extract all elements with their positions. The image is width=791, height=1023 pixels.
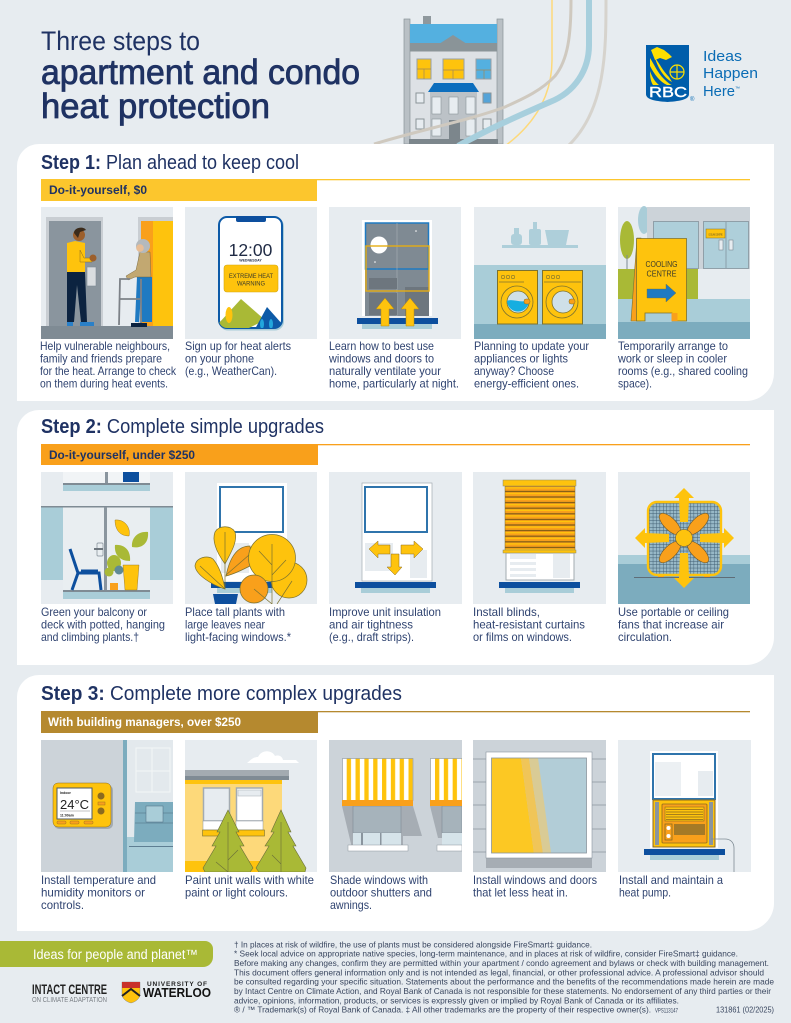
person: woman with walker — [119, 239, 152, 327]
step 2 heading: Step 2: Complete simple upgrades — [41, 416, 324, 438]
phone landscape — [219, 299, 283, 329]
Intact Centre logo: ON CLIMATE ADAPTATION — [32, 997, 107, 1004]
sill — [355, 582, 436, 588]
step 1 heading: Step 1: Plan ahead to keep cool — [41, 152, 299, 174]
step 3 cost bar — [41, 711, 750, 733]
step 3 captions — [41, 873, 723, 912]
arrows up — [376, 298, 394, 326]
washer — [498, 270, 538, 324]
footnotes: * Seek local advice on appropriate native species, long-term maintenance, and in places at risk of wildfire, consider FireSmart‡ guidance. — [234, 949, 738, 959]
windows — [204, 788, 230, 821]
tile: awnings — [329, 740, 462, 872]
step 2 cost bar — [41, 444, 750, 465]
cloud — [247, 751, 299, 763]
caption 3 — [328, 339, 459, 390]
heat pump unit — [653, 800, 715, 847]
step 1 cost bar: Do-it-yourself, $0 — [49, 185, 147, 197]
footnotes: advice, opinions, information, products, or services is expressly given or implied by Royal Bank of Canada or its affiliates. — [234, 995, 679, 1005]
caption 1 — [41, 605, 165, 644]
sill — [362, 324, 432, 329]
caption 1: on them during heat events. — [40, 376, 168, 390]
caption 4: Planning to update your — [474, 339, 589, 353]
caption 4: appliances or lights — [474, 352, 568, 366]
caption 2: large leaves near — [185, 618, 265, 632]
caption 5: Install and maintain a — [619, 873, 723, 887]
caption 2: Place tall plants with — [185, 605, 285, 619]
shelf — [502, 222, 578, 248]
caption 5: space). — [618, 376, 652, 390]
thermostat device: Indoor — [60, 791, 72, 795]
footnotes: by Intact Centre on Climate Action, and Royal Bank of Canada is not responsible for these statements. No endorsement of any third parties or their — [234, 986, 771, 996]
caption 2: light-facing windows.* — [185, 630, 291, 644]
shield — [122, 982, 140, 1003]
lion — [650, 47, 684, 85]
caption 1: deck with potted, hanging — [41, 618, 165, 632]
tagline: Ideas — [703, 48, 742, 65]
caption 3: (e.g., draft strips). — [329, 630, 414, 644]
panel: step 2 — [17, 410, 774, 665]
registered mark: ® — [690, 96, 695, 103]
caption 2 — [185, 873, 314, 900]
caption 5 — [617, 339, 748, 390]
fan blades — [656, 510, 712, 566]
left window — [348, 806, 408, 851]
sofa — [129, 802, 173, 847]
blind slats — [505, 486, 575, 552]
tagline: ™ — [735, 86, 740, 92]
caption 3: Improve unit insulation — [329, 605, 441, 619]
footnotes: VPS113147 — [655, 1009, 678, 1015]
tagline — [703, 48, 758, 100]
tile: tall leafy plants — [185, 472, 317, 604]
caption 2: Sign up for heat alerts — [185, 339, 291, 353]
caption 3: home, particularly at night. — [329, 376, 459, 390]
footnotes: 131861 (02/2025) — [716, 1005, 774, 1015]
caption 1 — [40, 339, 176, 390]
tile: cooling centre — [618, 206, 750, 339]
caption 1: Green your balcony or — [41, 605, 147, 619]
caption 3 — [329, 605, 441, 644]
tile: fan — [618, 472, 750, 604]
plant in pot — [104, 520, 148, 590]
step 3 cost bar: With building managers, over $250 — [48, 717, 241, 729]
tile: phone heat alert — [185, 207, 317, 339]
caption 5: Temporarily arrange to — [618, 339, 728, 353]
caption 5 — [619, 873, 723, 900]
thermostat device: 11:00am — [60, 814, 74, 818]
insulation arrows — [369, 541, 423, 575]
tile: draft insulation — [329, 472, 462, 604]
tile: low-e window — [473, 740, 606, 872]
thermostat device: 24°C — [60, 797, 89, 812]
caption 1: family and friends prepare — [40, 352, 162, 366]
decorative ribbons — [374, 0, 606, 146]
shield — [646, 45, 689, 102]
caption 5: circulation. — [618, 630, 672, 644]
tagline: Happen — [703, 65, 758, 82]
warning box: WARNING — [237, 280, 265, 288]
person: man — [67, 228, 96, 326]
tile: laundry appliances — [474, 207, 606, 339]
caption 3 — [330, 873, 432, 912]
sill — [211, 582, 273, 588]
caption 4: or films on windows. — [473, 630, 572, 644]
caption 4 — [473, 873, 597, 900]
caption 5: Use portable or ceiling — [618, 605, 729, 619]
caption 5: fans that increase air — [618, 618, 724, 632]
caption 2: Paint unit walls with white — [185, 873, 314, 887]
caption 1 — [41, 873, 156, 912]
caption 4: heat-resistant curtains — [473, 618, 585, 632]
caption 1: and climbing plants.† — [41, 630, 139, 644]
trees — [203, 810, 306, 872]
sill — [644, 849, 725, 855]
footnotes: ® / ™ Trademark(s) of Royal Bank of Canada. ‡ All other trademarks are the property of their respective owner(s). — [234, 1005, 651, 1015]
caption 3: Learn how to best use — [329, 339, 434, 353]
caption 4 — [474, 339, 589, 390]
University of Waterloo logo: WATERLOO — [143, 986, 211, 1000]
caption 1: for the heat. Arrange to check — [40, 364, 176, 378]
warning box: EXTREME HEAT — [229, 273, 273, 280]
step 3 heading: Step 3: Complete more complex upgrades — [41, 683, 402, 705]
caption 5: work or sleep in cooler — [617, 352, 727, 366]
caption 2 — [185, 339, 291, 378]
airflow arrows — [635, 488, 734, 588]
step 2 cost bar: Do-it-yourself, under $250 — [49, 450, 195, 462]
caption 3: outdoor shutters and — [330, 886, 432, 900]
caption 4: that let less heat in. — [473, 886, 568, 900]
footnotes: be consulted regarding your specific situation. Statements about the performance and the benefits of the recommendations made herein are made — [234, 977, 774, 987]
chair — [70, 549, 101, 590]
panel: step 1 — [17, 144, 774, 401]
caption 4: Install windows and doors — [473, 873, 597, 887]
caption 2: paint or light colours. — [185, 886, 288, 900]
sill — [499, 582, 580, 588]
footnotes: † In places at risk of wildfire, the use of plants must be considered alongside FireSmart‡ guidance. — [234, 939, 592, 949]
glass layers — [492, 758, 586, 853]
warning box — [224, 265, 278, 292]
caption 3: naturally ventilate your — [329, 364, 441, 378]
RBC logo — [646, 45, 758, 103]
tile: balcony plants — [41, 472, 173, 604]
tile: neighbours at doors — [41, 207, 173, 339]
caption 4: anyway? Choose — [474, 364, 554, 378]
caption 3: awnings. — [330, 898, 372, 912]
tile: thermostat — [41, 740, 173, 872]
building illustration — [404, 16, 503, 144]
pipe — [711, 839, 734, 872]
caption 5 — [618, 605, 729, 644]
step 2 captions — [41, 605, 729, 644]
small door sign: COOLING CENTRE — [708, 232, 722, 236]
caption 4: energy-efficient ones. — [474, 376, 579, 390]
footnotes: This document offers general information only and is not intended as legal, financial, or other professional advice. A professional advisor should — [234, 967, 764, 977]
tile: phone heat alert: WEDNESDAY — [239, 258, 262, 262]
cooling centre sign: CENTRE — [646, 270, 676, 278]
caption 3: and air tightness — [329, 618, 413, 632]
tile: heat pump — [618, 740, 751, 872]
plant leaves — [195, 527, 307, 604]
tagline: Here — [703, 83, 735, 100]
tile: blinds — [473, 472, 606, 604]
step 1 captions — [40, 339, 748, 390]
panel: step 3 — [17, 675, 774, 931]
caption 1: controls. — [41, 898, 84, 912]
title line 2: apartment and condo — [41, 53, 360, 92]
caption 1: humidity monitors or — [41, 886, 145, 900]
caption 2: on your phone — [185, 352, 254, 366]
phone clock: 12:00 — [229, 240, 273, 260]
RBC letters: RBC — [649, 84, 687, 101]
right awning — [430, 758, 462, 806]
caption 4: Install blinds, — [473, 605, 540, 619]
caption 1: Install temperature and — [41, 873, 156, 887]
caption 5: rooms (e.g., shared cooling — [618, 364, 748, 378]
cooling centre sign — [631, 238, 686, 321]
title line 3: heat protection — [41, 87, 270, 126]
footnotes: Before making any changes, confirm they are permitted within your apartment / condo agreement and bylaws or check with building management. — [234, 958, 769, 968]
green tagline bar — [0, 941, 213, 967]
tile: window ventilation — [329, 207, 461, 339]
University of Waterloo logo — [122, 981, 211, 1003]
left awning — [342, 758, 413, 806]
plant pot — [213, 594, 238, 604]
Intact Centre logo — [32, 981, 107, 1004]
caption 1: Help vulnerable neighbours, — [40, 339, 170, 353]
caption 2 — [185, 605, 291, 644]
Intact Centre logo: INTACT CENTRE — [32, 981, 107, 997]
right window — [437, 806, 462, 851]
wall — [185, 784, 282, 861]
dryer — [542, 270, 582, 324]
caption 5: heat pump. — [619, 886, 671, 900]
cooling centre sign: COOLING — [646, 260, 678, 269]
title — [41, 26, 360, 126]
caption 4 — [473, 605, 585, 644]
green tagline bar: Ideas for people and planet™ — [33, 947, 198, 962]
tile: light paint wall — [185, 740, 317, 872]
caption 2: (e.g., WeatherCan). — [185, 364, 277, 378]
University of Waterloo logo: UNIVERSITY OF — [147, 981, 207, 988]
caption 3: windows and doors to — [328, 352, 434, 366]
step 1 cost bar — [41, 179, 750, 201]
thermostat device — [53, 783, 113, 829]
title line 1: Three steps to — [41, 26, 200, 56]
caption 3: Shade windows with — [330, 873, 428, 887]
footnotes — [234, 939, 774, 1015]
